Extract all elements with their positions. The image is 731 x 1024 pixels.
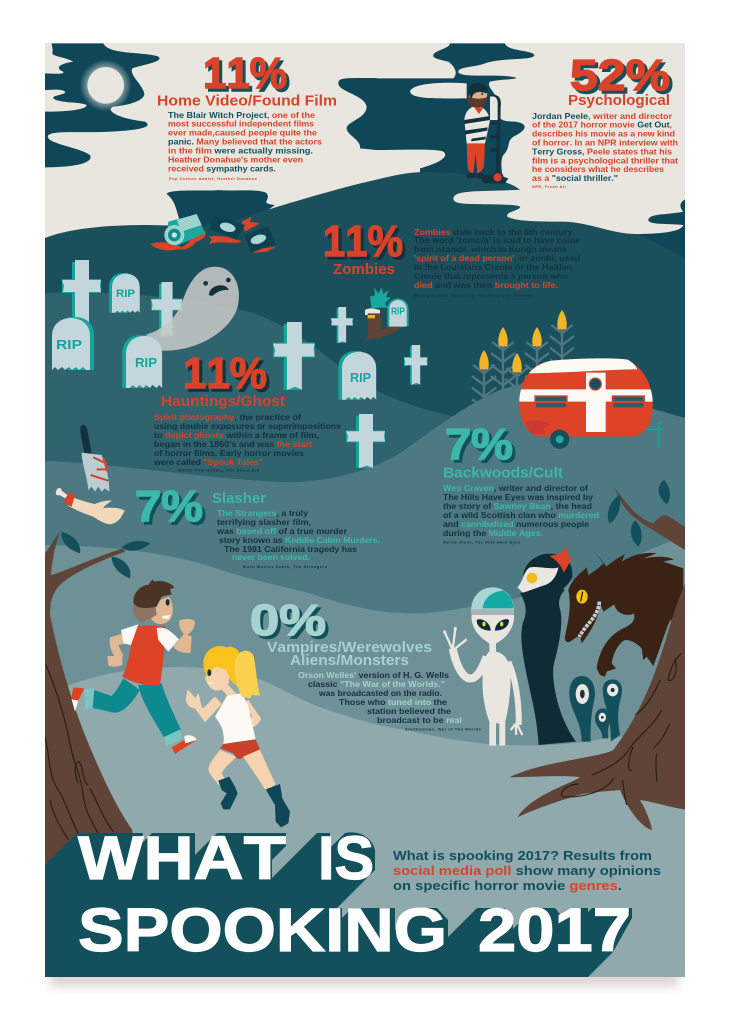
source: Horror Film History, The Silent Era: [178, 468, 260, 472]
body text: of a wild Scottish clan who murdered: [443, 511, 599, 520]
body text: The 1981 California tragedy has: [224, 545, 357, 554]
stat: slasher: [135, 482, 380, 569]
body text: [532, 112, 678, 183]
stat: slasher: 7%: [138, 485, 206, 534]
stat: psychological: Psychological: [568, 92, 670, 109]
body text: Jordan Peele , writer and director: [532, 112, 673, 121]
hill: upper teal: [45, 172, 685, 418]
tombstones: RIP: [116, 288, 135, 300]
source: Smithsonian, War of The Worlds: [405, 726, 482, 732]
graveyard crosses: [62, 260, 427, 468]
body text: [414, 228, 580, 290]
body text: terrifying slasher film,: [217, 518, 311, 527]
body text: the story of Sawney Bean , the head: [443, 502, 592, 511]
intro text: What is spooking 2017? Results from: [393, 848, 652, 863]
stat: home video found film: Home Video/Found Film: [157, 92, 337, 110]
stat: zombies: Zombies: [333, 261, 395, 278]
body text: using double exposures or superimpositions: [154, 422, 341, 431]
eye creatures: [569, 676, 622, 742]
body text: received sympathy cards.: [168, 164, 276, 174]
dark cloud swirl top right: [375, 43, 534, 190]
source: Mental Floss, The Hills Have Eyes: [443, 540, 521, 544]
body text: [216, 509, 380, 562]
body text: [168, 111, 322, 174]
body text: in the film were actually missing.: [168, 146, 313, 156]
body text: to depict ghosts within a frame of film,: [154, 431, 319, 440]
zombie hand rising from grave: RIP: [391, 307, 405, 318]
title: What is spooking 2017: IS: [318, 824, 374, 892]
stat: home video found film: [157, 49, 337, 181]
stat: zombies: 11%: [326, 220, 406, 269]
body text: of horror films. Early horror movies: [154, 449, 304, 458]
intro text: [393, 848, 661, 893]
body text: broadcast to be real: [377, 716, 462, 725]
body text: of horror. In an NPR interview with: [532, 138, 678, 147]
body text: Orson Welles' version of H. G. Wells: [298, 671, 449, 680]
source: Pop Culture Addict, Heather Donahue: [169, 176, 258, 181]
vampire: [517, 546, 576, 745]
intro text: social media poll show many opinions: [393, 863, 661, 878]
body text: he considers what he describes: [532, 165, 664, 174]
stat: home video found film: 11%: [206, 52, 290, 101]
stat: psychological: 52%: [573, 54, 673, 103]
icon: straitjacket man on hand truck: [464, 83, 508, 183]
body text: The word 'zombie' is said to have come: [414, 236, 580, 245]
stat: slasher: Slasher: [212, 490, 266, 507]
body text: The Strangers , a truly: [217, 509, 308, 518]
hill: forest floor: [45, 541, 685, 746]
girl running: [186, 646, 290, 827]
body text: Wes Craven , writer and director of: [443, 484, 588, 493]
stat: hauntings ghost: 11%: [186, 352, 270, 401]
intro text: on specific horror movie genres .: [393, 878, 622, 893]
poster drop shadow: [50, 968, 678, 986]
stat: vampires werewolves aliens monsters: 0%: [250, 596, 326, 645]
stat: vampires werewolves aliens monsters: Vampires/Werewolves: [267, 639, 432, 656]
title: What is spooking 2017: WHAT: [78, 824, 286, 892]
body text: Creole that represents a person who: [414, 272, 568, 281]
tombstones: RIP: [350, 370, 371, 385]
body text: was based off of a true murder: [216, 527, 348, 536]
body text: classic "The War of the Worlds.": [308, 680, 445, 689]
title: What is spooking 2017: [77, 835, 629, 952]
body text: were called "Spook Tales": [153, 458, 263, 467]
boy running: [71, 579, 197, 754]
icon: camera and tapes: [150, 214, 277, 253]
body text: Spirit photography , the practice of: [154, 413, 301, 422]
body text: most successful independent films: [168, 120, 314, 128]
body text: as a "social thriller.": [532, 174, 618, 183]
stat: hauntings ghost: 11%: [183, 349, 267, 398]
body text: panic. Many believed that the actors: [168, 138, 322, 146]
body text: story known as Keddie Cabin Murders.: [219, 536, 380, 545]
body text: ever made,caused people quite the: [168, 128, 317, 138]
body text: died and was then brought to life.: [414, 281, 558, 290]
right tree and monsters: [443, 480, 688, 830]
tombstones: RIP: [135, 355, 157, 370]
body text: of the 2017 horror movie Get Out ,: [532, 121, 672, 130]
hill: backwoods: [45, 384, 685, 614]
title: What is spooking 2017: 2017: [478, 896, 631, 964]
title: What is spooking 2017: SPOOKING: [78, 896, 447, 964]
body text: Zombies date back to the 8th century.: [414, 228, 575, 237]
stat: backwoods cult: Backwoods/Cult: [443, 464, 563, 482]
title shadow: [45, 832, 632, 977]
source: NPR, Fresh Air: [532, 184, 566, 189]
stat: backwoods cult: 7%: [445, 420, 513, 469]
camper trailer: [519, 358, 663, 449]
icon: knife: [80, 425, 109, 492]
body text: during the Middle Ages.: [443, 529, 543, 538]
stat: vampires werewolves aliens monsters: 0%: [253, 599, 329, 648]
tombstones: [52, 273, 376, 400]
tree trunk and roots: [509, 488, 688, 830]
alien: [443, 587, 522, 746]
hill: foreground: [45, 667, 685, 977]
dark cloud swirl top centre: [338, 78, 377, 150]
werewolf: [565, 548, 683, 677]
stat: home video found film: 11%: [203, 49, 287, 98]
body text: was broadcasted on the radio.: [318, 689, 442, 698]
zombie hand rising from grave: [363, 287, 409, 340]
source: Birth Movies Death, The Strangers: [243, 564, 328, 569]
left tree: [45, 530, 150, 873]
stat: hauntings ghost: Hauntings/Ghost: [161, 393, 285, 410]
leaves: [61, 532, 150, 578]
body text: began in the 1860's and was the start: [154, 440, 312, 449]
stat: slasher: 7%: [135, 482, 203, 531]
stat: backwoods cult: 7%: [448, 423, 516, 472]
stat: psychological: 52%: [570, 51, 670, 100]
body text: Terry Gross , Peele states that his: [532, 147, 672, 156]
body text: never been solved.: [232, 553, 310, 562]
tombstones: RIP: [56, 337, 82, 352]
body text: The Blair Witch Project , one of the: [168, 111, 315, 120]
icon: corn stalks: [472, 310, 574, 403]
body text: 'spirit of a dead person' , or zonbi, used: [414, 254, 580, 263]
icon: severed arm: [56, 488, 125, 524]
cream sky: [45, 43, 685, 238]
body text: from nzambi, which in Kongo means: [414, 245, 567, 254]
source: Michigan State University, The History of Zombies: [414, 292, 533, 298]
hill: graveyard: [45, 292, 452, 482]
body text: Heather Donahue's mother even: [168, 156, 303, 164]
ghost: [145, 267, 239, 351]
body text: station believed the: [367, 707, 451, 716]
body text: Those who tuned into the: [339, 698, 447, 707]
dark cloud behind camera: [166, 190, 275, 226]
body text: [298, 671, 462, 725]
body text: describes his movie as a new kind: [532, 130, 675, 139]
stat: backwoods cult: [443, 420, 599, 544]
stat: zombies: 11%: [323, 217, 403, 266]
cream cloud right with dark tongue: [453, 183, 685, 258]
body text: [153, 413, 341, 467]
stat: psychological: [532, 51, 678, 189]
stat: vampires werewolves aliens monsters: Aliens/Monsters: [290, 652, 409, 669]
dark cloud swirl with moon: [45, 43, 160, 167]
body text: in the Louisiana Creole or the Haitian: [414, 263, 572, 272]
body text: and cannibalized numerous people: [443, 520, 589, 529]
body text: film is a psychological thriller that: [532, 156, 678, 165]
stat: zombies: [323, 217, 580, 298]
leaves: [608, 480, 670, 547]
stat: vampires werewolves aliens monsters: [250, 596, 482, 732]
body text: [443, 484, 599, 538]
stat: hauntings ghost: [153, 349, 341, 472]
body text: The Hills Have Eyes was inspired by: [443, 493, 593, 502]
